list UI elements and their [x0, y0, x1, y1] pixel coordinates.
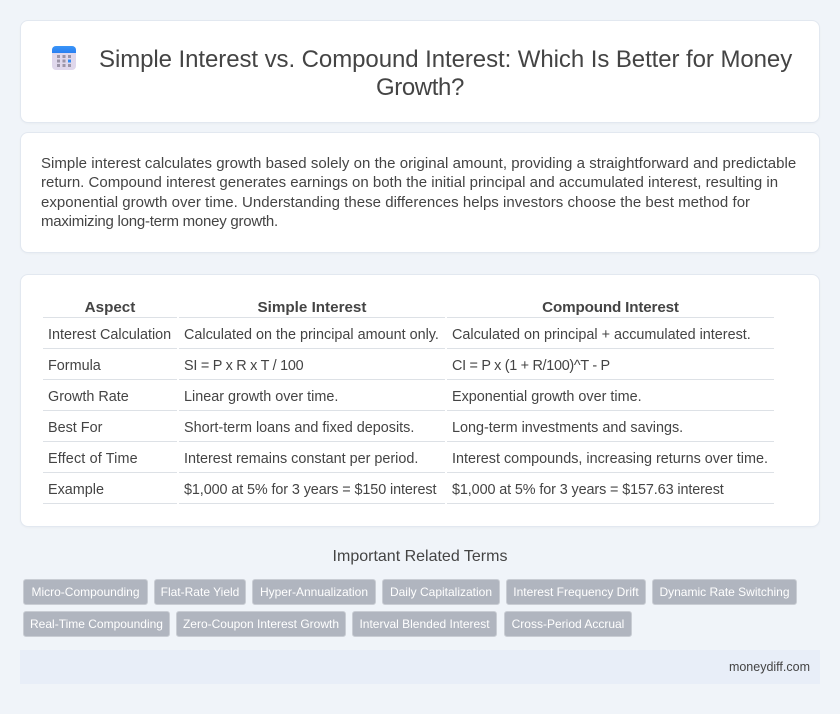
table header row: [85, 299, 679, 316]
row: example: $1,000 at 5% for 3 years = $157.63 interest: [452, 482, 724, 498]
table header row: Simple Interest: [258, 299, 366, 316]
text block: description: Simple interest calculates growth based solely on the original amount, providing a straightforward and predictable: [41, 155, 796, 172]
table header row: Compound Interest: [542, 299, 679, 316]
tag: [506, 579, 646, 605]
row: example: [48, 482, 724, 498]
text block: description: maximizing long-term money growth.: [41, 213, 278, 230]
tag: Flat-Rate Yield: [161, 585, 239, 599]
text block: description: return. Compound interest generates earnings on both the initial principal and accumulated interest, resulting in: [41, 174, 778, 191]
row: effect of time: Interest remains constant per period.: [184, 451, 418, 467]
row: effect of time: Interest compounds, increasing returns over time.: [452, 451, 768, 467]
tag: [23, 579, 148, 605]
row: formula: Formula: [48, 358, 101, 374]
table rules: [43, 317, 774, 504]
tag: Real-Time Compounding: [30, 617, 163, 631]
tag: [504, 611, 632, 637]
tag: Hyper-Annualization: [260, 585, 368, 599]
icon: calendar: [52, 46, 76, 70]
row: growth rate: Exponential growth over time.: [452, 389, 642, 405]
heading: important related terms: Important Related Terms: [333, 548, 507, 565]
tag: [382, 579, 500, 605]
row: effect of time: Effect of Time: [48, 451, 138, 467]
tag: Zero-Coupon Interest Growth: [183, 617, 339, 631]
tag: [23, 611, 170, 637]
row: growth rate: Growth Rate: [48, 389, 129, 405]
row: best for: Long-term investments and savings.: [452, 420, 683, 436]
row: formula: [48, 358, 610, 374]
tag: Dynamic Rate Switching: [659, 585, 790, 599]
row: example: Example: [48, 482, 104, 498]
tag: [352, 611, 497, 637]
text block: description: [41, 155, 796, 230]
tag: Daily Capitalization: [390, 585, 492, 599]
panel: comparison table: [20, 274, 820, 527]
title second line: Growth?: [376, 74, 464, 101]
row: formula: CI = P x (1 + R/100)^T - P: [452, 358, 610, 374]
row: best for: Short-term loans and fixed deposits.: [184, 420, 414, 436]
panel: description: [20, 132, 820, 253]
row: best for: [48, 420, 683, 436]
tag: Cross-Period Accrual: [512, 617, 624, 631]
row: interest calculation: Interest Calculation: [48, 327, 171, 343]
row: formula: SI = P x R x T / 100: [184, 358, 303, 374]
tag: Interval Blended Interest: [359, 617, 490, 631]
row: growth rate: [48, 389, 642, 405]
row: interest calculation: [48, 327, 751, 343]
row: effect of time: [48, 451, 768, 467]
row: growth rate: Linear growth over time.: [184, 389, 338, 405]
tag: [176, 611, 346, 637]
tag: [652, 579, 797, 605]
panel: related term tags: [23, 579, 797, 637]
tag: Micro-Compounding: [31, 585, 140, 599]
row: interest calculation: Calculated on principal + accumulated interest.: [452, 327, 751, 343]
tag: Interest Frequency Drift: [513, 585, 639, 599]
table header row: Aspect: [85, 299, 135, 316]
row: best for: Best For: [48, 420, 102, 436]
footer bar: [20, 650, 820, 684]
row: interest calculation: Calculated on the principal amount only.: [184, 327, 439, 343]
row: example: $1,000 at 5% for 3 years = $150 interest: [184, 482, 436, 498]
panel: title header: [20, 20, 820, 123]
text block: description: exponential growth over time. Understanding these differences helps investors choose the best method for: [41, 194, 750, 211]
tag: [252, 579, 376, 605]
tag: [154, 579, 246, 605]
title: Simple Interest vs. Compound Interest: Which Is Better for Money: [99, 46, 792, 73]
footer text: moneydiff.com: moneydiff.com: [729, 660, 810, 674]
